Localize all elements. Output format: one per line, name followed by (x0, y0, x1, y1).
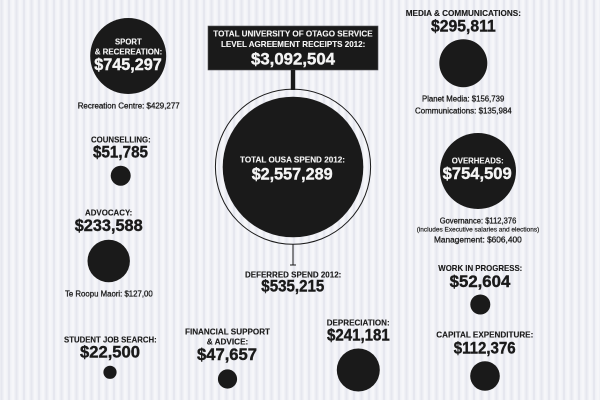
item: media and communications: $295,811 (431, 18, 496, 36)
item: sport and recreation: & RECEREATION: (95, 47, 162, 57)
item: deferred spend (245, 269, 341, 296)
item: counselling: $51,785 (93, 144, 148, 162)
item: work in progress: $52,604 (450, 273, 511, 291)
value: total spend: $2,557,289 (252, 165, 333, 183)
chart: total OUSA spend circle (215, 89, 371, 244)
label: total spend: TOTAL OUSA SPEND 2012: (240, 154, 345, 164)
item: depreciation (327, 317, 390, 392)
item: media and communications (406, 8, 521, 115)
item: student job search: $22,500 (80, 344, 140, 362)
item: overheads: Governance: $112,376 (440, 216, 517, 226)
item: work in progress (438, 263, 522, 314)
item: sport and recreation: $745,297 (94, 56, 162, 74)
item: capital expenditure: $112,376 (454, 340, 516, 358)
item: advocacy: ADVOCACY: (85, 208, 132, 218)
item: overheads: OVERHEADS: (452, 156, 504, 166)
item: deferred spend: $535,215 (261, 278, 324, 296)
item: work in progress: WORK IN PROGRESS: (438, 263, 522, 273)
item: financial support and advice: $47,657 (197, 346, 257, 364)
item: media and communications: Communications: $135,984 (415, 105, 512, 115)
item: student job search: STUDENT JOB SEARCH: (64, 335, 157, 345)
connector: deferred spend line (290, 244, 296, 265)
panel: total receipts box (208, 26, 378, 70)
item: overheads: $754,509 (443, 165, 512, 183)
item: capital expenditure (436, 330, 533, 391)
item: depreciation: DEPRECIATION: (327, 317, 390, 327)
item: media and communications: MEDIA & COMMUNICATIONS: (406, 8, 521, 18)
item: counselling (91, 135, 151, 186)
connector: box to circle (291, 70, 295, 90)
item: sport and recreation: Recreation Centre: $429,277 (78, 101, 180, 111)
item: sport and recreation: SPORT (115, 37, 142, 47)
item: overheads (417, 133, 539, 244)
item: advocacy (65, 208, 153, 299)
item: financial support and advice (185, 327, 270, 389)
item: student job search (64, 335, 157, 379)
item: financial support and advice: & ADVICE: (207, 336, 248, 346)
value: receipts: $3,092,504 (251, 50, 336, 68)
item: advocacy: $233,588 (75, 217, 143, 235)
item: sport and recreation (78, 18, 180, 111)
item: counselling: COUNSELLING: (91, 135, 151, 145)
item: advocacy: Te Roopu Maori: $127,00 (65, 289, 153, 299)
heading: receipts label line 1: TOTAL UNIVERSITY OF OTAGO SERVICE (213, 29, 373, 39)
item: overheads: (includes Executive salaries and elections) (417, 226, 539, 233)
item: overheads: Management: $606,400 (434, 234, 522, 244)
item: depreciation: $241,181 (327, 326, 390, 344)
item: financial support and advice: FINANCIAL SUPPORT (185, 327, 270, 337)
item: capital expenditure: CAPITAL EXPENDITURE: (436, 330, 533, 340)
item: deferred spend: DEFERRED SPEND 2012: (245, 269, 341, 279)
item: media and communications: Planet Media: $156,739 (422, 94, 505, 104)
heading: receipts label line 2: LEVEL AGREEMENT RECEIPTS 2012: (221, 39, 365, 49)
